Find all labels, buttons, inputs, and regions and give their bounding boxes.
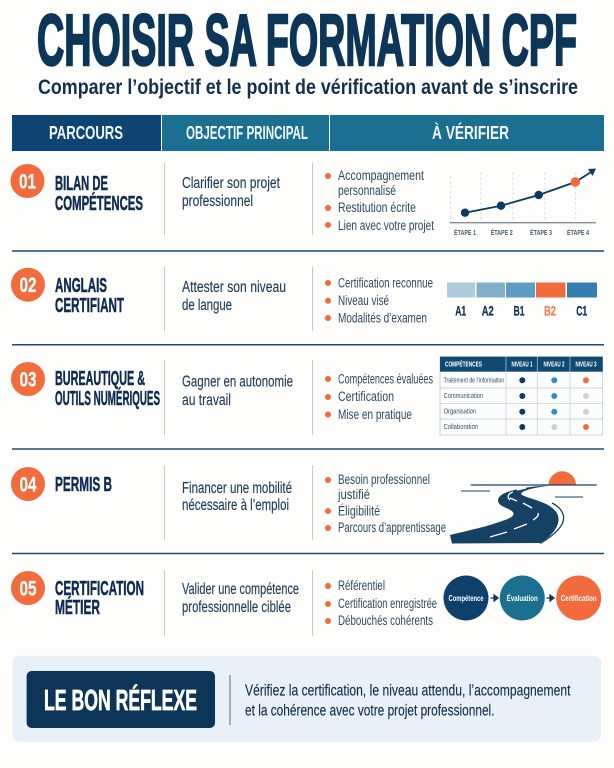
number badge 05 <box>11 571 45 605</box>
parcours name: PERMIS B <box>55 474 112 496</box>
line chart: étapes: ÉTAPE 4 <box>567 228 590 237</box>
checklist: Modalités d’examen <box>338 310 427 326</box>
checklist: personnalisé <box>338 183 396 198</box>
number badge 03 <box>11 362 45 396</box>
objective text: de langue <box>182 297 232 314</box>
level scale A1 to C1: A2 <box>482 302 494 318</box>
table header: À VÉRIFIER <box>432 122 509 143</box>
checklist: Éligibilité <box>338 504 380 518</box>
checklist: Référentiel <box>338 578 385 593</box>
checklist: Parcours d’apprentissage <box>338 520 446 535</box>
objective text: Gagner en autonomie <box>182 374 293 390</box>
process flow <box>444 576 601 620</box>
parcours name <box>55 275 124 317</box>
checklist: Certification reconnue <box>338 276 433 290</box>
skills matrix table: Traitement de l’information <box>444 376 504 384</box>
number badge 04: 04 <box>20 474 37 496</box>
callout text <box>245 683 571 720</box>
panel: row 2 anglais certifiant <box>11 267 597 331</box>
table header: PARCOURS <box>49 123 123 143</box>
process flow: Compétence <box>448 593 484 603</box>
level scale A1 to C1 <box>447 282 597 318</box>
objective text: au travail <box>182 392 231 409</box>
number badge 04 <box>11 467 45 501</box>
parcours name <box>55 368 160 410</box>
parcours name: BILAN DE <box>55 173 108 195</box>
skills matrix table: COMPÉTENCES <box>445 360 482 369</box>
checklist: Accompagnement <box>338 168 424 183</box>
checklist <box>325 472 446 535</box>
checklist: Restitution écrite <box>338 200 416 215</box>
callout badge <box>27 671 215 728</box>
callout text: et la cohérence avec votre projet professionnel. <box>245 703 494 720</box>
panel: row 4 permis B <box>11 465 597 544</box>
skills matrix table <box>440 357 603 435</box>
checklist: Certification <box>338 389 394 404</box>
number badge 01: 01 <box>19 170 36 194</box>
number badge 01 <box>10 164 44 198</box>
panel: row 5 certification métier <box>11 570 601 636</box>
objective text: nécessaire à l’emploi <box>182 497 289 514</box>
skills matrix table: NIVEAU 2 <box>544 362 565 369</box>
line chart: étapes <box>450 168 596 237</box>
icon: road to sunset <box>450 471 597 544</box>
parcours name: MÉTIER <box>55 596 100 619</box>
objective text <box>182 480 292 514</box>
objective text: Attester son niveau <box>182 279 286 296</box>
checklist: Mise en pratique <box>338 407 412 422</box>
checklist: Besoin professionnel <box>338 472 430 487</box>
skills matrix table: Collaboration <box>444 422 478 431</box>
level scale A1 to C1: C1 <box>576 302 587 318</box>
checklist <box>325 578 437 628</box>
parcours name: CERTIFICATION <box>55 578 144 600</box>
number badge 03: 03 <box>20 368 36 392</box>
line chart: étapes: ÉTAPE 2 <box>491 228 513 237</box>
parcours name <box>55 578 144 619</box>
checklist <box>325 372 433 422</box>
objective text: Clarifier son projet <box>182 175 281 192</box>
skills matrix table: NIVEAU 1 <box>512 362 533 369</box>
level scale A1 to C1: B2 <box>544 302 556 318</box>
checklist: justifié <box>337 487 370 502</box>
process flow: Certification <box>561 593 597 603</box>
objective text: professionnelle ciblée <box>182 599 291 616</box>
level scale A1 to C1: B1 <box>514 302 525 318</box>
callout badge: LE BON RÉFLEXE <box>44 683 197 717</box>
objective text <box>182 581 299 616</box>
checklist: Lien avec votre projet <box>338 218 434 233</box>
skills matrix table: Organisation <box>444 407 476 416</box>
table header <box>12 115 604 151</box>
objective text <box>182 175 281 210</box>
level scale A1 to C1: A1 <box>455 302 466 318</box>
parcours name: COMPÉTENCES <box>55 192 143 215</box>
checklist <box>325 276 433 326</box>
objective text: Financer une mobilité <box>182 480 292 497</box>
callout: le bon réflexe <box>12 656 601 742</box>
objective text: professionnel <box>182 193 253 210</box>
panel: row 3 bureautique: OUTILS NUMÉRIQUES <box>55 387 160 410</box>
checklist: Compétences évaluées <box>338 372 433 386</box>
number badge 05: 05 <box>20 578 37 600</box>
checklist: Certification enregistrée <box>338 596 437 611</box>
skills matrix table: Communication <box>444 391 483 400</box>
checklist: Niveau visé <box>338 293 389 308</box>
skills matrix table: NIVEAU 3 <box>576 362 597 369</box>
parcours name: ANGLAIS <box>55 275 107 297</box>
line chart: étapes: ÉTAPE 3 <box>530 228 552 237</box>
objective text <box>182 374 293 409</box>
number badge 02 <box>11 268 45 302</box>
line chart: étapes: ÉTAPE 1 <box>454 228 476 237</box>
objective text <box>182 279 286 314</box>
parcours name: CERTIFIANT <box>55 295 124 317</box>
process flow: Évaluation <box>507 593 538 603</box>
checklist <box>325 168 434 233</box>
parcours name <box>55 173 143 215</box>
panel: row 3 bureautique <box>11 357 603 435</box>
checklist: Débouchés cohérents <box>338 613 433 628</box>
table header: OBJECTIF PRINCIPAL <box>186 123 308 143</box>
parcours name: BUREAUTIQUE & <box>55 368 145 390</box>
objective text: Valider une compétence <box>182 581 299 598</box>
number badge 02: 02 <box>20 274 36 297</box>
panel: row 1 bilan de compétences <box>10 163 596 237</box>
